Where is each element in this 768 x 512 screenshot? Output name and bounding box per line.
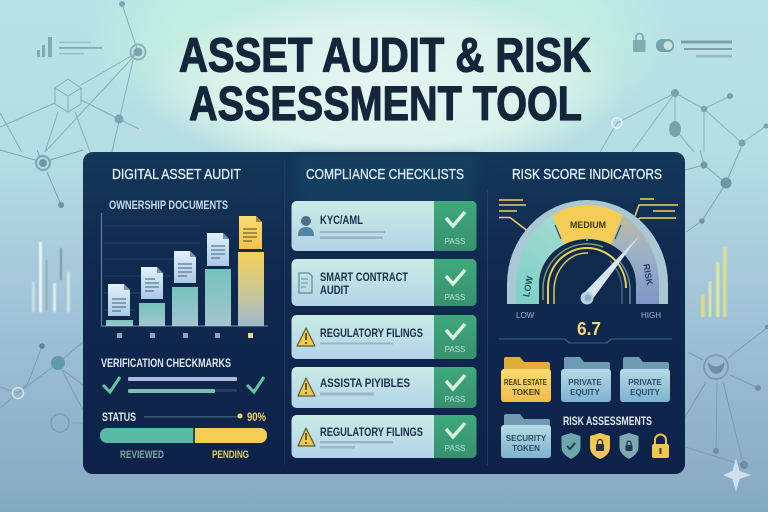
folder: real estate token: TOKEN bbox=[512, 388, 540, 397]
heading: risk score indicators: RISK SCORE INDICATORS bbox=[512, 166, 662, 183]
status row: 90% bbox=[247, 412, 266, 424]
nodes: top right bbox=[669, 89, 768, 146]
icon: text lines top right bbox=[681, 40, 732, 58]
label: low: LOW bbox=[516, 311, 535, 320]
panel: compliance checklists bbox=[292, 166, 476, 458]
title bbox=[179, 30, 591, 131]
card: KYC/AML: KYC/AML bbox=[320, 213, 363, 227]
icon: document 4 bbox=[207, 233, 229, 266]
folder: security token: TOKEN bbox=[512, 444, 540, 453]
icon: toggle top right bbox=[656, 39, 674, 52]
network decoration: top right bbox=[600, 93, 766, 152]
subheading: ownership documents: OWNERSHIP DOCUMENTS bbox=[109, 198, 228, 212]
panel: risk score indicators bbox=[499, 166, 678, 459]
folder: private equity 1: EQUITY bbox=[570, 388, 601, 397]
callout lines: left bbox=[499, 200, 529, 232]
network decoration: lower right bbox=[685, 327, 768, 465]
score value: 6.7 bbox=[577, 319, 601, 339]
label: reviewed: REVIEWED bbox=[120, 449, 164, 461]
chart: left light bars bbox=[32, 242, 70, 312]
label: low vertical: LOW bbox=[521, 275, 535, 298]
card: KYC/AML bbox=[292, 201, 476, 251]
icon: check left bbox=[103, 377, 120, 392]
card: regulatory filings: PASS bbox=[445, 345, 465, 354]
folder: private equity 2 bbox=[620, 357, 670, 402]
folder: security token: SECURITY bbox=[506, 434, 547, 443]
heading: compliance checklists: COMPLIANCE CHECKLISTS bbox=[306, 166, 464, 183]
folder: private equity 1 bbox=[561, 357, 611, 402]
bar chart: ownership documents bbox=[102, 213, 268, 338]
card: regulatory filings 2 bbox=[292, 415, 476, 458]
network decoration: top left bbox=[0, 4, 146, 152]
folder: private equity 2: PRIVATE bbox=[628, 378, 662, 387]
card: smart contract audit bbox=[292, 259, 476, 306]
folder: real estate token: REAL ESTATE bbox=[504, 378, 548, 387]
nodes: lower right bbox=[708, 325, 768, 469]
nodes: upper right side bbox=[699, 162, 732, 224]
gauge inner arcs bbox=[543, 235, 630, 304]
gauge bbox=[499, 199, 678, 343]
icon: document 2 bbox=[141, 267, 163, 299]
heading: digital asset audit: DIGITAL ASSET AUDIT bbox=[112, 166, 241, 183]
card: regulatory filings 2: PASS bbox=[445, 444, 465, 453]
network decoration: upper right side bbox=[685, 150, 740, 232]
status row bbox=[102, 410, 266, 424]
folder: private equity 1: PRIVATE bbox=[568, 378, 602, 387]
card: assista payables: ASSISTA PIYIBLES bbox=[320, 376, 410, 390]
nodes: lower left bbox=[39, 343, 65, 370]
label: risk vertical: RISK bbox=[641, 263, 655, 286]
chart: right yellow bars bbox=[701, 247, 726, 317]
icon: lock top right bbox=[633, 34, 646, 52]
card: regulatory filings 2: REGULATORY FILINGS bbox=[320, 425, 423, 439]
card: regulatory filings: REGULATORY FILINGS bbox=[320, 326, 423, 340]
icon: document 3 bbox=[174, 251, 196, 283]
icon: document 5 bbox=[239, 216, 262, 249]
card: smart contract audit: AUDIT bbox=[320, 283, 350, 297]
network decoration: upper left side bbox=[0, 150, 83, 205]
network decoration: lower left bbox=[0, 342, 83, 432]
card: assista payables: PASS bbox=[445, 395, 465, 404]
nodes: upper left side bbox=[39, 159, 64, 208]
subheading: risk assessments: RISK ASSESSMENTS bbox=[563, 414, 652, 428]
dashboard panel bbox=[83, 152, 685, 474]
icon: shield check bbox=[562, 433, 580, 459]
needle bbox=[580, 236, 639, 304]
icon: small bar chart top left bbox=[37, 37, 102, 57]
title glow bbox=[145, 0, 625, 180]
label: pending: PENDING bbox=[212, 449, 249, 461]
verification progress lines bbox=[128, 377, 237, 393]
status progress bar bbox=[100, 428, 267, 443]
folder: security token bbox=[501, 414, 551, 458]
card: smart contract audit: SMART CONTRACT bbox=[320, 270, 409, 284]
panel: digital asset audit bbox=[100, 166, 268, 461]
icon: shield lock blue bbox=[620, 433, 638, 459]
status row: STATUS bbox=[102, 410, 136, 424]
label: high: HIGH bbox=[641, 311, 661, 320]
icon: padlock bbox=[652, 434, 669, 458]
nodes: top left bbox=[114, 1, 143, 132]
card: assista payables bbox=[292, 367, 476, 408]
card: KYC/AML: PASS bbox=[445, 237, 465, 246]
icon: check right bbox=[247, 377, 264, 392]
background mint wash bbox=[80, 0, 680, 160]
label: medium: MEDIUM bbox=[570, 220, 606, 230]
card: regulatory filings bbox=[292, 315, 476, 359]
subheading: verification checkmarks: VERIFICATION CHECKMARKS bbox=[101, 356, 231, 370]
icon: shield lock yellow bbox=[590, 433, 610, 459]
icon: document 1 bbox=[108, 284, 130, 316]
folder: real estate token bbox=[501, 357, 551, 402]
callout lines: right bbox=[631, 199, 678, 226]
title: ASSESSMENT TOOL bbox=[189, 78, 582, 131]
title: ASSET AUDIT & RISK bbox=[179, 30, 591, 82]
folder: private equity 2: EQUITY bbox=[630, 388, 661, 397]
icon: sparkle bbox=[723, 458, 751, 492]
card: smart contract audit: PASS bbox=[445, 293, 465, 302]
